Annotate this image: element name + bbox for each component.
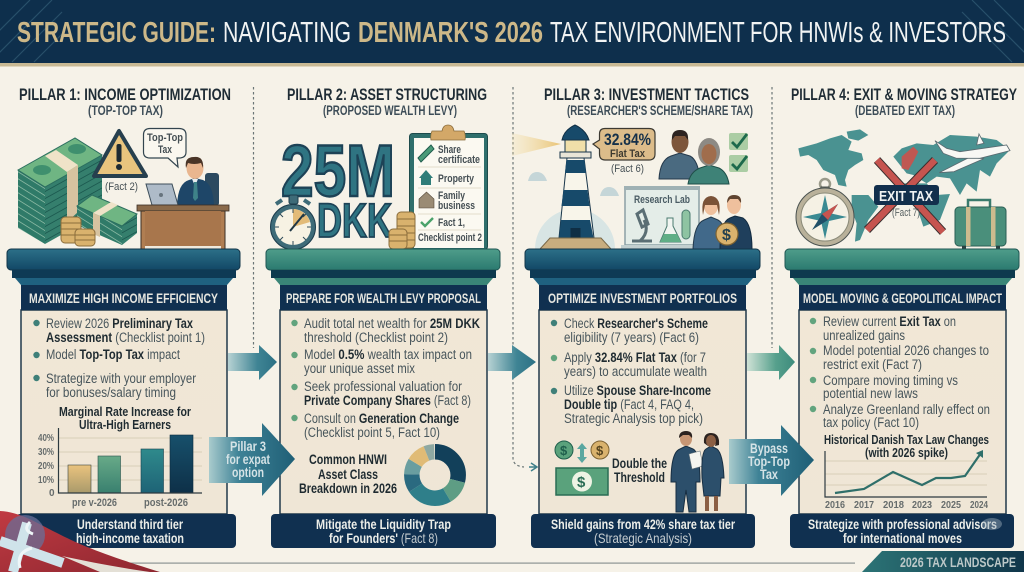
icon: warning triangle (94, 131, 146, 176)
icon: stopwatch (270, 195, 316, 250)
takeaway banner (531, 514, 755, 548)
takeaway banner: Understand third tier (77, 516, 183, 532)
callout: 32.84% flat tax: 32.84% (604, 130, 651, 149)
takeaway banner (16, 514, 236, 548)
donut chart (412, 452, 458, 498)
checklist: threshold (Checklist point 2) (304, 330, 448, 345)
icon: gold coins (61, 217, 95, 246)
takeaway banner (271, 514, 496, 548)
checklist: unrealized gains (823, 328, 905, 343)
capital (785, 249, 1019, 285)
icon: crossed-out exit tax (867, 160, 943, 232)
checklist: Model Top-Top Tax impact (46, 347, 180, 362)
arrow: bypass top-top tax: Top-Top (748, 454, 790, 469)
icon: danish flag ribbon (0, 511, 160, 572)
badge: 2026 tax landscape (862, 551, 1024, 572)
panel body (799, 310, 1006, 514)
icon: double the threshold (529, 441, 609, 495)
icon: flask (660, 218, 681, 242)
double the threshold label: Double the (612, 455, 667, 471)
25M DKK figure: DKK (317, 195, 392, 248)
clipboard: asset types: Share (438, 144, 461, 156)
takeaway banner: for Founders' (Fact 8) (329, 530, 438, 546)
fact label: (Fact 7) (892, 207, 920, 219)
icon: family business (419, 192, 434, 208)
checklist: potential new laws (823, 386, 918, 401)
arrow: bypass top-top tax: Tax (760, 467, 778, 482)
clipboard: asset types: Family (438, 190, 466, 202)
icon: lighthouse (512, 125, 619, 249)
clipboard: asset types: certificate (438, 154, 480, 166)
donut chart label: Common HNWI (309, 451, 387, 467)
line chart: historical tax law changes: (with 2026 spike) (865, 446, 948, 460)
bar chart: marginal rate: post-2026 (144, 497, 188, 509)
icon: crossed-out exit tax: EXIT TAX (879, 188, 933, 205)
checklist: Compare moving timing vs (823, 373, 958, 388)
icon: advisers (659, 130, 729, 184)
arrow: pillar 3 for expat option (209, 423, 295, 496)
checklist: Double tip (Fact 4, FAQ 4, (564, 397, 694, 412)
icon: check boxes (729, 133, 748, 172)
checklist: Apply 32.84% Flat Tax (for 7 (564, 350, 706, 365)
checklist (33, 316, 205, 400)
section header: PREPARE FOR WEALTH LEVY PROPOSAL (286, 291, 481, 306)
checklist: Private Company Shares (Fact 8) (304, 393, 471, 408)
bar chart: marginal rate: Marginal Rate Increase for (59, 405, 191, 419)
bar chart: marginal rate: Ultra-High Earners (79, 418, 171, 432)
icon: stacks of cash (18, 138, 137, 245)
checklist: Model potential 2026 changes to (823, 343, 989, 358)
takeaway banner: Mitigate the Liquidity Trap (316, 516, 451, 532)
bar chart: marginal rate: 10% (38, 475, 54, 486)
fact label: (Fact 6) (611, 163, 644, 175)
checklist: Audit total net wealth for 25M DKK (304, 316, 480, 331)
line chart: historical tax law changes: 2016 (825, 500, 845, 511)
line chart: historical tax law changes: 2024 (970, 500, 988, 511)
double the threshold label: Threshold (614, 469, 665, 485)
capital (525, 249, 760, 285)
capital (7, 249, 240, 285)
arrow: pillar 3 for expat option: for expat (226, 452, 270, 467)
checklist: Analyze Greenland rally effect on (823, 402, 990, 417)
icon: couple reviewing documents (671, 431, 724, 512)
icon: house (419, 170, 433, 185)
checklist: tax policy (Fact 10) (823, 415, 919, 430)
icon: plane (935, 134, 1010, 173)
donut chart label (299, 451, 397, 496)
checklist: restrict exit (Fact 7) (823, 357, 922, 372)
donut chart label: Breakdown in 2026 (299, 480, 397, 496)
panel: pillar 1 (7, 85, 240, 548)
arrow: pillar 1 to 2 (228, 345, 277, 380)
checklist: Assessment (Checklist point 1) (46, 330, 205, 345)
icon: suitcase (955, 200, 1006, 249)
arrow: pillar 2 to 3 (488, 345, 536, 380)
checklist: your unique asset mix (304, 361, 415, 376)
donut chart label: Asset Class (318, 466, 378, 482)
arrow: bypass top-top tax (729, 425, 814, 496)
title (17, 17, 1006, 49)
checklist: Consult on Generation Change (304, 411, 459, 426)
section header: MAXIMIZE HIGH INCOME EFFICIENCY (29, 291, 218, 306)
checklist (551, 316, 711, 426)
icon: double the threshold: $ (596, 443, 604, 458)
bar chart: marginal rate: 0 (49, 488, 55, 499)
takeaway banner: high-income taxation (76, 530, 184, 546)
speech bubble: top-top tax: Top-Top (147, 132, 183, 144)
bar chart: marginal rate: 40% (38, 433, 54, 444)
bar chart: marginal rate: 20% (38, 461, 54, 472)
icon: microscope (632, 210, 652, 241)
section header (539, 285, 746, 310)
speech bubble: top-top tax (144, 128, 186, 167)
takeaway banner: for international moves (843, 530, 962, 546)
icon: double the threshold: $ (577, 474, 586, 491)
line chart: historical tax law changes (824, 433, 989, 511)
bar chart: marginal rate: 30% (38, 447, 54, 458)
line chart: historical tax law changes: 2018 (883, 500, 904, 511)
capital (266, 249, 500, 285)
icon: test tube (682, 210, 690, 239)
panel: pillar 3 (512, 85, 760, 548)
checklist: Seek professional valuation for (304, 379, 462, 394)
takeaway banner: Shield gains from 42% share tax tier (551, 516, 735, 532)
checklist: eligibility (7 years) (Fact 6) (564, 330, 699, 345)
pillar 1 heading: PILLAR 1: INCOME OPTIMIZATION (19, 85, 231, 104)
arrow: pillar 3 to 4 (747, 345, 795, 380)
clipboard: asset types: Property (438, 173, 475, 185)
icon: executive at desk (137, 157, 229, 249)
clipboard: asset types: business (438, 200, 475, 212)
section header (799, 285, 1006, 310)
line chart: historical tax law changes: 2025 (941, 500, 961, 511)
pillar 4 subheading: (DEBATED EXIT TAX) (855, 103, 955, 118)
checklist (291, 316, 480, 440)
pillar 1 subheading: (TOP-TOP TAX) (88, 103, 163, 118)
icon: check (421, 218, 433, 226)
icon: investors with coin: $ (722, 227, 731, 244)
panel: pillar 2 (266, 85, 500, 548)
panel body (280, 310, 487, 514)
section header (280, 285, 487, 310)
icon: coin stacks (389, 212, 415, 249)
checklist: years) to accumulate wealth (564, 364, 707, 379)
callout: 32.84% flat tax: Flat Tax (610, 148, 646, 160)
arrow: bypass top-top tax: Bypass (750, 441, 788, 456)
takeaway banner (790, 514, 1014, 548)
checklist: Review current Exit Tax on (823, 314, 956, 329)
checklist: Strategic Analysis top pick) (564, 411, 703, 426)
header banner (0, 0, 1024, 66)
checklist (810, 314, 990, 430)
title: STRATEGIC GUIDE: (17, 17, 216, 49)
title: DENMARK'S 2026 (358, 17, 543, 49)
fact label: (Fact 2) (105, 181, 138, 193)
line chart: historical tax law changes: 2017 (854, 500, 874, 511)
takeaway banner: (Strategic Analysis) (594, 530, 692, 546)
clipboard: asset types (410, 125, 488, 250)
bar chart: marginal rate: pre v-2026 (72, 497, 117, 509)
icon: compass (796, 179, 854, 246)
checklist: Utilize Spouse Share-Income (564, 383, 711, 398)
line chart: historical tax law changes: 2023 (912, 500, 932, 511)
clipboard: asset types: Checklist point 2 (418, 232, 482, 244)
checklist: for bonuses/salary timing (46, 385, 176, 400)
panel body (539, 310, 746, 514)
icon: world map (798, 129, 1010, 242)
25M DKK figure: 25M (281, 131, 395, 212)
pillar 2 subheading: (PROPOSED WEALTH LEVY) (323, 103, 457, 118)
callout: 32.84% flat tax (593, 128, 655, 160)
bar chart: marginal rate (38, 405, 202, 509)
icon: double the threshold: $ (560, 443, 568, 458)
double the threshold label (612, 455, 667, 485)
pillar 3 subheading: (RESEARCHER'S SCHEME/SHARE TAX) (567, 103, 753, 118)
section header (21, 285, 227, 310)
icon: investors with coin (693, 195, 752, 249)
checklist: Model 0.5% wealth tax impact on (304, 347, 472, 362)
checklist: Review 2026 Preliminary Tax (46, 316, 193, 331)
panel body (21, 310, 227, 514)
section header: OPTIMIZE INVESTMENT PORTFOLIOS (548, 291, 737, 306)
research lab board: Research Lab (634, 194, 690, 206)
arrow: pillar 3 for expat option: Pillar 3 (230, 439, 266, 454)
pillar 3 heading: PILLAR 3: INVESTMENT TACTICS (544, 85, 749, 104)
dotted dividers (254, 87, 772, 467)
speech bubble: top-top tax: Tax (158, 144, 173, 156)
arrow: pillar 3 for expat option: option (232, 465, 264, 480)
footer rule (130, 562, 855, 564)
clipboard: asset types: Fact 1, (438, 217, 465, 229)
checklist: Strategize with your employer (46, 371, 196, 386)
checklist: (Checklist point 5, Fact 10) (304, 425, 440, 440)
25M DKK figure (281, 131, 395, 248)
checklist: Check Researcher's Scheme (564, 316, 708, 331)
title: NAVIGATING (223, 17, 351, 49)
pillar 2 heading: PILLAR 2: ASSET STRUCTURING (287, 85, 487, 104)
panel: pillar 4 (785, 85, 1019, 548)
icon: share certificate (418, 145, 434, 162)
research lab board (621, 186, 703, 249)
